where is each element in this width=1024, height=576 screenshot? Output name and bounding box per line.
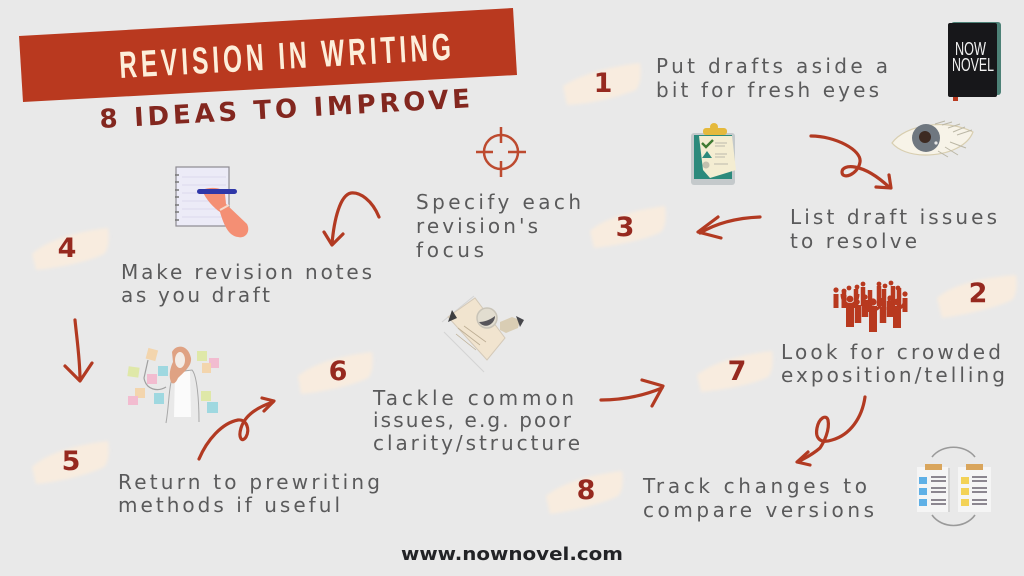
title banner — [19, 8, 517, 102]
step 5 text — [118, 470, 380, 517]
step 8 number: 8 — [577, 475, 595, 506]
icon: crowd — [833, 281, 908, 332]
step 7 text: exposition/telling — [781, 363, 1005, 387]
step 2 number — [937, 275, 1017, 318]
step 1 text — [656, 54, 888, 102]
step 4 text — [121, 260, 372, 307]
icon: target — [476, 127, 526, 177]
step 8 text: Track changes to — [642, 474, 867, 498]
subtitle: 8 IDEAS TO IMPROVE — [99, 84, 471, 135]
icon: Now Novel book: NOVEL — [952, 55, 994, 75]
arrow: eye to list — [811, 136, 891, 188]
icon: document and magnifier — [442, 296, 524, 372]
step 4 number: 4 — [58, 233, 76, 264]
step 7 text: Look for crowded — [781, 340, 1001, 364]
step text: specify focus: Specify each — [416, 190, 581, 214]
step 6 text — [372, 386, 580, 455]
step 6 number: 6 — [329, 356, 347, 387]
step 7 text — [781, 340, 1005, 387]
icon: eye — [892, 121, 973, 157]
step 5 number — [32, 441, 109, 484]
step 6 text: issues, e.g. poor — [373, 408, 572, 432]
icon: Now Novel book — [948, 22, 1001, 101]
step 8 number — [546, 471, 623, 514]
step 4 text: Make revision notes — [121, 260, 372, 284]
step 3 number — [590, 206, 666, 248]
step 2 number: 2 — [969, 278, 987, 309]
arrow: to step 3 — [698, 217, 760, 238]
icon: Now Novel book: NOW — [955, 39, 986, 59]
step 1 text: Put drafts aside a — [656, 54, 888, 78]
arrow: to step 8 — [797, 397, 865, 465]
step 4 number — [32, 228, 109, 270]
step 4 text: as you draft — [121, 283, 270, 307]
step text: specify focus: focus — [416, 238, 484, 262]
step 5 number: 5 — [62, 446, 80, 477]
step 8 text — [642, 474, 874, 522]
step text: specify focus — [416, 190, 581, 262]
arrow: to notes — [324, 193, 379, 245]
step 2 text: list issues: to resolve — [790, 229, 917, 253]
step 6 text: Tackle common — [372, 386, 574, 410]
icon: clipboard checklist — [691, 123, 736, 185]
website footer: www.nownovel.com — [401, 545, 623, 565]
icon: two clipboards compared — [917, 447, 991, 526]
icon: notebook and hand — [175, 167, 248, 237]
step 2 text: list issues: List draft issues — [790, 205, 997, 229]
arrow: to step 6 — [199, 398, 274, 459]
step 7 number: 7 — [728, 356, 746, 387]
arrow: to step 7 — [601, 380, 663, 406]
step text: specify focus: revision's — [416, 214, 538, 238]
step 5 text: methods if useful — [118, 493, 340, 517]
step 5 text: Return to prewriting — [118, 470, 380, 494]
step 6 number — [298, 352, 373, 394]
step 1 number — [563, 63, 641, 105]
step 2 text: list issues — [790, 205, 997, 253]
arrow: 4 to 5 — [65, 320, 92, 381]
step 6 text: clarity/structure — [373, 431, 580, 455]
step 3 number: 3 — [616, 212, 634, 243]
step 8 text: compare versions — [643, 498, 874, 522]
title banner: REVISION IN WRITING — [118, 25, 452, 86]
step 1 text: bit for fresh eyes — [656, 78, 879, 102]
step 7 number — [697, 351, 773, 392]
icon: woman with sticky notes — [127, 347, 219, 423]
step 1 number: 1 — [594, 68, 612, 99]
